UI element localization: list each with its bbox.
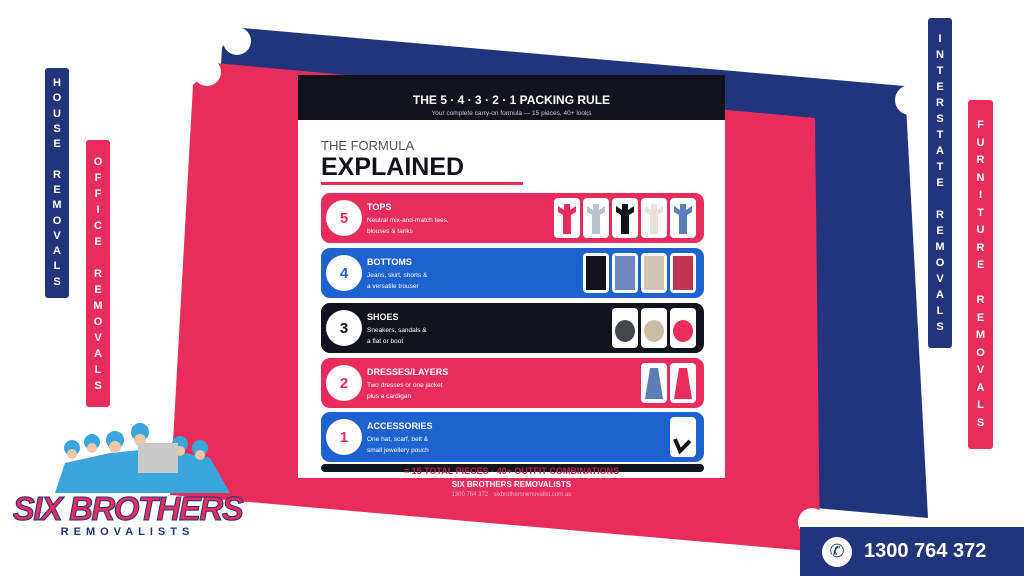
tag: interstate removals: T (937, 65, 943, 77)
row: dresses: DRESSES/LAYERS (367, 367, 448, 377)
row: accessories: ACCESSORIES (367, 421, 433, 431)
footer text (404, 466, 619, 498)
row: shoes (321, 303, 704, 353)
tag: furniture removals: L (977, 399, 984, 411)
logo: REMOVALISTS (61, 526, 194, 538)
tag: furniture removals: E (977, 259, 984, 271)
tag: interstate removals: N (936, 49, 944, 61)
row: tops: 5 (340, 210, 348, 226)
tag: interstate removals: M (935, 241, 945, 253)
tag: house removals: U (53, 108, 61, 120)
row: tops (321, 193, 704, 243)
row: shoes: 3 (340, 320, 348, 336)
tag: office removals: E (94, 236, 102, 248)
row: bottoms (321, 248, 704, 298)
tag: house removals: V (53, 230, 61, 242)
logo: SIX BROTHERS (13, 490, 242, 527)
tag: house removals: S (53, 123, 61, 135)
header bar: Your complete carry-on formula — 15 pieces, 40+ looks (432, 110, 592, 117)
tag: office removals: S (94, 380, 102, 392)
tag: house removals: E (53, 138, 61, 150)
row: dresses: 2 (340, 374, 348, 392)
tag: office removals: O (94, 316, 102, 328)
tag: office removals: M (93, 300, 103, 312)
tag: furniture removals: S (977, 416, 984, 428)
row: dresses: Two dresses or one jacket (367, 382, 443, 389)
heading (321, 138, 523, 185)
tag: office removals (86, 140, 110, 407)
icon: phone (822, 536, 852, 566)
phone box: 1300 764 372 (864, 540, 986, 562)
tag: office removals: F (95, 188, 101, 200)
row: accessories: small jewellery pouch (367, 447, 429, 454)
tag: interstate removals: V (936, 273, 944, 285)
tag: interstate removals: S (936, 321, 944, 333)
tag: furniture removals: N (977, 172, 984, 184)
panel: infographic (298, 75, 725, 478)
icon: team (55, 423, 230, 493)
tag: interstate removals: A (936, 289, 944, 301)
tag: house removals: S (53, 276, 61, 288)
tag: house removals: L (54, 260, 60, 272)
tag: furniture removals: U (977, 224, 984, 236)
row: tops: TOPS (367, 202, 391, 212)
tag: furniture removals: R (977, 154, 984, 166)
row: accessories: 1 (340, 428, 348, 446)
tag: house removals: A (53, 245, 61, 257)
tag: interstate removals: E (936, 225, 944, 237)
tag: furniture removals: E (977, 312, 984, 324)
tag: office removals: I (96, 204, 100, 216)
tag: interstate removals: E (936, 177, 944, 189)
tag: interstate removals: R (936, 209, 944, 221)
tag: interstate removals: S (936, 113, 944, 125)
tag: interstate removals: I (938, 33, 942, 45)
header bar: THE 5 · 4 · 3 · 2 · 1 PACKING RULE (413, 93, 610, 107)
row: dresses (321, 358, 704, 408)
row: tops: Neutral mix-and-match tees, (367, 217, 449, 224)
tag: office removals: E (94, 284, 102, 296)
tag: office removals: A (94, 348, 102, 360)
tag: furniture removals: V (977, 364, 984, 376)
row: shoes: a flat or boot (367, 338, 403, 345)
tag: office removals: F (95, 172, 101, 184)
total bar (321, 464, 704, 472)
heading: EXPLAINED (321, 153, 464, 181)
footer text: 1300 764 372 · sixbrothersremovalist.com.au (451, 492, 572, 498)
row: shoes: SHOES (367, 312, 399, 322)
row: accessories (321, 412, 704, 462)
tag: office removals: R (94, 268, 102, 280)
footer text: SIX BROTHERS REMOVALISTS (452, 480, 571, 489)
header bar (298, 75, 725, 120)
tag: furniture removals: T (977, 206, 984, 218)
tag: house removals: M (52, 199, 62, 211)
tag: furniture removals: M (976, 329, 985, 341)
tag: furniture removals: R (977, 242, 984, 254)
tag: interstate removals: A (936, 145, 944, 157)
tag: office removals: O (94, 156, 102, 168)
footer text: = 15 TOTAL PIECES · 40+ OUTFIT COMBINATIONS (404, 466, 619, 476)
tag: interstate removals: R (936, 97, 944, 109)
tag: interstate removals: O (936, 257, 944, 269)
row: dresses: plus a cardigan (367, 393, 411, 400)
tag: house removals (45, 68, 69, 298)
tag: house removals: H (53, 77, 61, 89)
row: bottoms: BOTTOMS (367, 257, 412, 267)
row: bottoms: Jeans, skirt, shorts & (367, 272, 427, 279)
tag: house removals: O (53, 92, 61, 104)
tag: interstate removals: T (937, 129, 943, 141)
icon: phone: ✆ (829, 541, 845, 561)
row: tops: blouses & tanks (367, 228, 413, 235)
tag: furniture removals: U (977, 136, 984, 148)
tag: interstate removals (928, 18, 952, 348)
row: bottoms: 4 (340, 264, 348, 282)
tag: house removals: E (53, 184, 61, 196)
tag: interstate removals: L (937, 305, 943, 317)
row: accessories: One hat, scarf, belt & (367, 436, 428, 443)
tag: house removals: O (53, 215, 61, 227)
tag: office removals: L (95, 364, 101, 376)
heading: THE FORMULA (321, 138, 414, 153)
tag: furniture removals: O (976, 346, 985, 358)
phone box (800, 527, 1024, 576)
tag: office removals: C (94, 220, 102, 232)
logo (12, 423, 244, 538)
tag: furniture removals: I (979, 189, 982, 201)
row: bottoms: a versatile trouser (367, 283, 419, 290)
tag: furniture removals (968, 100, 993, 449)
tag: house removals: R (53, 169, 61, 181)
tag: furniture removals: F (977, 119, 984, 131)
tag: interstate removals: T (937, 161, 943, 173)
tag: furniture removals: R (977, 294, 984, 306)
row: shoes: Sneakers, sandals & (367, 327, 427, 334)
tag: interstate removals: E (936, 81, 944, 93)
tag: office removals: V (94, 332, 102, 344)
tag: furniture removals: A (977, 382, 984, 394)
